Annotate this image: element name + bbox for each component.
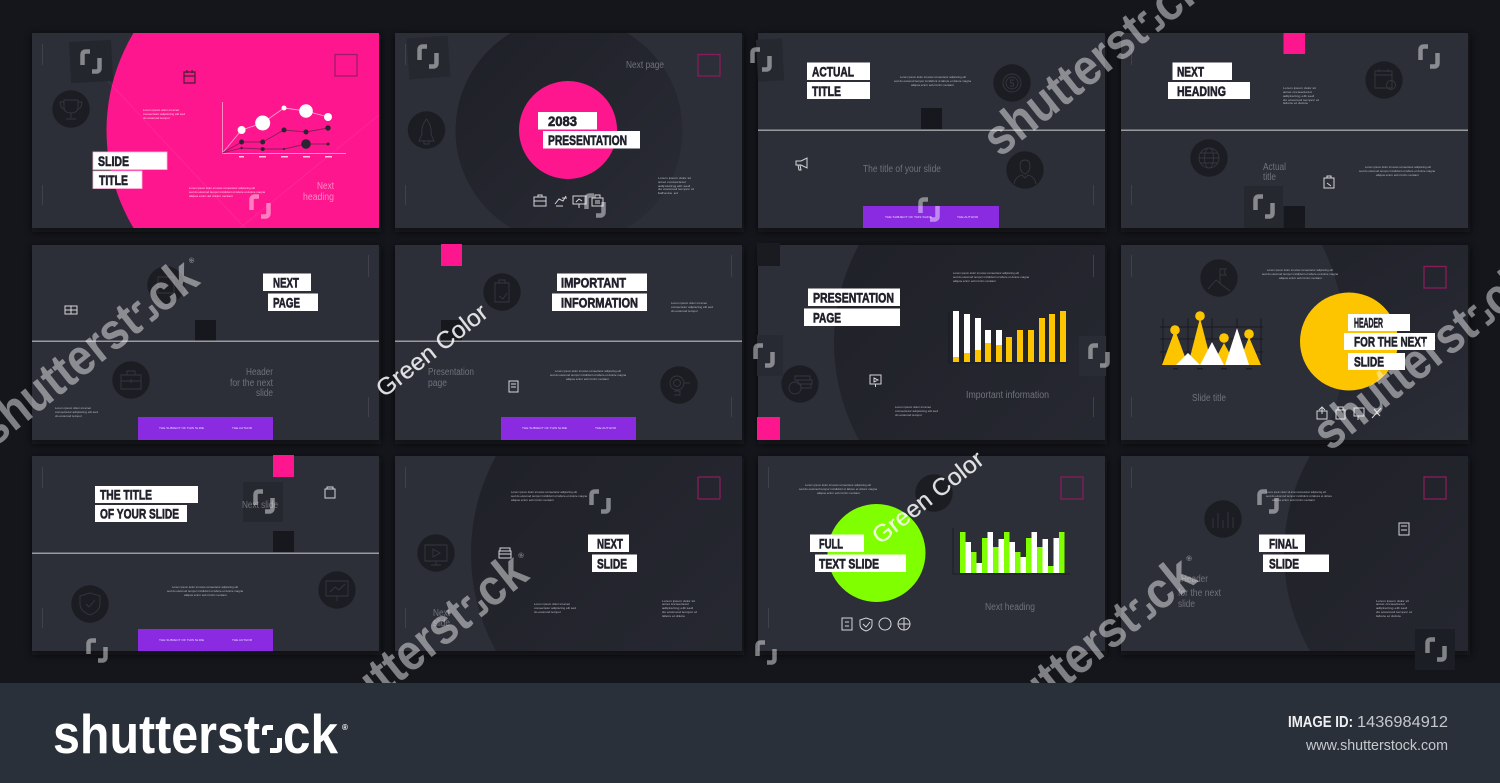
text block	[1266, 490, 1332, 502]
text block	[671, 301, 713, 313]
title label: NEXT HEADING	[1168, 62, 1250, 99]
text block: do eiusmod tempor ut	[1283, 98, 1319, 102]
heading: Next slide: slide	[433, 618, 450, 629]
purple bar	[138, 417, 273, 440]
watermark: shutterstock left: ck	[133, 247, 209, 323]
icon: person circle	[1006, 151, 1044, 189]
panel: slide 2	[395, 33, 742, 228]
text block: labore et dolore	[1376, 614, 1401, 618]
text block: aliqua enim ad minim veniam	[953, 279, 997, 283]
text block: sed do eiusmod tempor incididunt ut labore et dolore magna	[894, 79, 971, 83]
text block: aliqua enim ad minim veniam	[911, 83, 955, 87]
icon: flag mountain circle	[1200, 259, 1238, 297]
text block: sed do eiusmod tempor incididunt ut labore et dolore	[1266, 494, 1332, 498]
text block: do eiusmod tempor ut	[662, 610, 697, 614]
text block: consectetur adipiscing elit sed	[143, 112, 185, 116]
text block: adipiscing elit sed	[662, 606, 693, 610]
title label: NEXT HEADING: HEADING	[1177, 83, 1226, 99]
panel: slide 1	[32, 33, 379, 228]
title label: FULL TEXT SLIDE: FULL	[819, 536, 843, 552]
heading: Next slide: Next	[433, 608, 450, 619]
text block: sed do eiusmod tempor incididunt ut labore et dolore magna	[167, 589, 243, 593]
watermark: shutterstock bottom centre-left	[295, 536, 545, 752]
text block	[1262, 268, 1338, 280]
pink frame	[1424, 477, 1446, 499]
title label: FINAL SLIDE: FINAL	[1269, 536, 1298, 552]
green circle	[828, 504, 926, 602]
pink frame	[1424, 266, 1446, 288]
text block	[662, 599, 697, 618]
text block: Lorem ipsum dolor sit amet consectetur adipiscing elit	[900, 75, 966, 79]
line chart	[222, 102, 346, 158]
icon: calendar	[184, 70, 195, 83]
pink frame	[1061, 477, 1083, 499]
icon: logo badge	[242, 482, 283, 522]
title label: PRESENTATION PAGE: PRESENTATION	[813, 290, 894, 306]
text block: do eiusmod tempor	[143, 116, 170, 120]
icon: bar chart circle	[1204, 500, 1242, 538]
icon: logo badge: Next slide	[242, 500, 278, 511]
dark circle background	[1284, 456, 1468, 651]
title label: IMPORTANT INFORMATION: IMPORTANT	[561, 274, 626, 290]
panel: slide 7	[753, 243, 1110, 440]
title label: NEXT SLIDE	[588, 534, 637, 572]
text block	[895, 405, 938, 417]
heading: Presentation page	[428, 367, 474, 389]
website url: www.shutterstock.com	[1305, 738, 1448, 754]
text block: do eiusmod tempor	[534, 610, 561, 614]
purple bar: THE AUTHOR	[595, 426, 617, 430]
pink frame	[698, 54, 720, 76]
icon: clipboard	[1324, 176, 1334, 188]
title label: FULL TEXT SLIDE	[810, 534, 906, 572]
text block: consectetur adipiscing elit sed	[671, 305, 713, 309]
title label: SLIDE TITLE: TITLE	[99, 172, 128, 188]
heading: Header for the next slide: for the next	[230, 378, 273, 389]
heading: The title of your slide: The title of your slide	[863, 164, 941, 175]
icon: shield circle	[71, 585, 109, 623]
text block: aliqua enim ad minim veniam	[1376, 173, 1420, 177]
title label: SLIDE TITLE: SLIDE	[98, 153, 129, 169]
icon: logo badge	[69, 40, 113, 83]
text block	[534, 602, 576, 614]
purple bar: THE SUBJECT OF THIS SLIDE	[522, 426, 567, 430]
icon: coins	[499, 548, 511, 558]
heading: Header for the next slide: Header	[246, 367, 274, 378]
text block: Lorem ipsum dolor sit amet	[895, 405, 931, 409]
panel: slide 10	[395, 456, 742, 651]
text block: sed do eiusmod tempor incididunt ut labore et dolore magna	[1262, 272, 1338, 276]
title label: 2083 PRESENTATION	[538, 112, 640, 148]
watermark: shutterstock bottom centre-right: ck	[1130, 545, 1206, 621]
icon: monitor circle	[417, 534, 455, 572]
bar chart	[953, 528, 1070, 574]
dark circle background	[834, 245, 1105, 440]
text block: Lorem ipsum dolor sit	[1283, 86, 1316, 90]
heading: Next page: Next page	[626, 60, 664, 71]
footer logo: shutterstock: shutterst	[53, 703, 260, 765]
text block: amet consectetur	[1283, 90, 1312, 94]
text block: sed do eiusmod tempor incididunt ut labore et dolore magna	[953, 275, 1029, 279]
heading: Slide title: Slide title	[1192, 393, 1226, 404]
heading: Presentation page: Presentation	[428, 367, 474, 378]
pink square	[1284, 33, 1305, 54]
text block: Lorem ipsum dolor sit	[658, 176, 691, 180]
bar chart	[949, 311, 1068, 363]
icon: cards	[65, 306, 77, 314]
title label: NEXT PAGE: NEXT	[273, 274, 299, 290]
watermark: shutterstock bottom centre-right: shutterst	[963, 590, 1149, 755]
icon: clipboard circle	[483, 273, 521, 311]
text block	[189, 186, 265, 198]
icon: calendar circle	[1365, 61, 1403, 99]
purple bar	[138, 629, 273, 651]
purple bar: THE SUBJECT OF THIS SLIDE	[159, 638, 204, 642]
text block: sed do eiusmod tempor incididunt ut labore et dolore magna	[799, 487, 877, 491]
text block	[143, 108, 185, 120]
text block: do eiusmod tempor	[55, 414, 82, 418]
icon: logo bracket	[586, 196, 604, 216]
text block: do eiusmod tempor	[895, 413, 922, 417]
text block: Lorem ipsum dolor sit amet	[55, 406, 91, 410]
title label: HEADER FOR THE NEXT SLIDE: HEADER	[1354, 314, 1383, 330]
pink circle	[519, 81, 617, 179]
text block: aliqua enim ad minim veniam	[1279, 276, 1323, 280]
heading: Header for the next slide	[230, 367, 274, 399]
text block	[167, 585, 243, 597]
dark square	[195, 320, 216, 341]
icon: logo bracket	[1260, 492, 1276, 512]
text block: Lorem ipsum dolor sit	[662, 599, 695, 603]
icon: megaphone	[796, 158, 807, 170]
icon: trophy circle	[52, 90, 90, 128]
text block	[799, 483, 877, 495]
watermark: shutterstock bottom centre-left: ck	[462, 542, 538, 618]
text block	[1283, 86, 1319, 105]
purple bar	[863, 206, 999, 228]
heading: Next heading: Next	[317, 181, 334, 192]
title label: THE TITLE OF YOUR SLIDE: THE TITLE	[100, 486, 152, 502]
text block: sed do eiusmod tempor incididunt ut labore et dolore magna	[1359, 169, 1435, 173]
heading: Actual title: title	[1263, 172, 1276, 183]
title label: 2083 PRESENTATION: PRESENTATION	[548, 132, 627, 148]
icon row	[534, 195, 603, 208]
text block: sed do eiusmod tempor incididunt ut labore et dolore magna	[550, 373, 626, 377]
text block	[894, 75, 971, 87]
icon: presentation screen	[870, 375, 881, 387]
panel: slide 9	[32, 455, 379, 660]
text block: Lorem ipsum dolor sit amet consectetur adipiscing elit	[1267, 268, 1333, 272]
pink frame	[335, 54, 357, 76]
title label: PRESENTATION PAGE	[804, 288, 900, 326]
watermark: shutterstock bottom centre-left: shutterst	[295, 587, 481, 752]
icon: logo badge	[752, 38, 784, 82]
dark circle background	[471, 456, 742, 651]
purple bar: THE SUBJECT OF THIS SLIDE	[885, 215, 932, 219]
text block: adipiscing elit sed	[1376, 606, 1407, 610]
text block: aliqua enim ad minim veniam	[566, 377, 610, 381]
title label: NEXT PAGE: PAGE	[273, 294, 300, 310]
text block: consectetur adipiscing elit sed	[534, 606, 576, 610]
title label: FINAL SLIDE	[1259, 534, 1329, 572]
text block: Lorem ipsum dolor sit amet	[671, 301, 707, 305]
text block: Lorem ipsum dolor sit amet consectetur adipiscing elit	[805, 483, 871, 487]
text block: sed do eiusmod tempor incididunt ut labore et dolore magna	[511, 494, 587, 498]
icon: coin circle	[993, 64, 1031, 102]
heading: Header for the next slide: for the next	[1178, 588, 1221, 599]
text block: Lorem ipsum dolor sit amet consectetur adipiscing elit	[555, 369, 621, 373]
image id: 1436984912	[1357, 714, 1448, 731]
panel: slide 6	[395, 244, 742, 440]
icon: chart board circle	[318, 571, 356, 609]
text block: labore et	[658, 191, 678, 195]
icon: logo bracket	[252, 196, 268, 216]
icon: logo bracket	[758, 642, 774, 662]
panel: slide 8	[1121, 245, 1468, 440]
image id: IMAGE ID:	[1288, 714, 1353, 731]
panel: slide 3	[752, 33, 1105, 228]
icon: logo badge	[1244, 186, 1283, 228]
icon: rocket circle	[408, 111, 445, 149]
text block: aliqua enim ad minim veniam	[189, 194, 234, 198]
title label: ACTUAL TITLE: ACTUAL	[812, 64, 854, 80]
text block: Lorem ipsum dolor sit amet consectetur adipiscing elit	[1266, 490, 1326, 494]
text block: sed do eiusmod tempor incididunt ut labore et dolore magna	[189, 190, 265, 194]
pink square	[441, 244, 462, 266]
text block: do eiusmod tempor ut	[658, 187, 694, 191]
text block: Lorem ipsum dolor sit amet	[534, 602, 570, 606]
title label: ACTUAL TITLE	[807, 62, 870, 99]
text block: Lorem ipsum dolor sit amet consectetur adipiscing elit	[189, 186, 255, 190]
heading: Important information: Important information	[966, 390, 1049, 401]
title label: THE TITLE OF YOUR SLIDE: OF YOUR SLIDE	[100, 506, 179, 522]
heading: Header for the next slide: slide	[256, 388, 273, 399]
text block: consectetur adipiscing elit sed	[895, 409, 938, 413]
pink square	[273, 455, 294, 477]
image id	[1288, 714, 1448, 731]
title label: 2083 PRESENTATION: 2083	[548, 113, 577, 129]
icon row	[842, 618, 910, 631]
dark square	[1284, 206, 1305, 228]
title label: HEADER FOR THE NEXT SLIDE: SLIDE	[1354, 354, 1384, 370]
title label: PRESENTATION PAGE: PAGE	[813, 310, 841, 326]
watermark: shutterstock bottom centre-right: ®	[1184, 553, 1194, 564]
text block	[1376, 599, 1412, 618]
heading: Next heading: heading	[303, 192, 334, 203]
text block	[511, 490, 587, 502]
text block: adipiscing elit sed	[1283, 94, 1314, 98]
text block: aliqua enim ad minim veniam	[817, 491, 861, 495]
text block: consectetur adipiscing elit sed	[55, 410, 98, 414]
purple bar: THE AUTHOR	[232, 638, 253, 642]
dark square	[921, 108, 942, 129]
watermark: Green Color slide 11: Green Color	[867, 446, 989, 550]
icon: target bulb circle	[660, 366, 698, 404]
heading: Actual title	[1263, 162, 1286, 183]
mountain chart	[1160, 311, 1263, 370]
watermark: Green Color slide 6: Green Color	[371, 299, 493, 403]
icon: device	[1399, 523, 1409, 535]
icon: logo badge left	[756, 335, 783, 376]
heading: Header for the next slide	[1178, 574, 1221, 610]
text block: Lorem ipsum dolor sit amet consectetur adipiscing elit	[953, 271, 1019, 275]
heading: Next heading	[303, 181, 334, 203]
text block: Lorem ipsum dolor sit amet consectetur adipiscing elit	[511, 490, 577, 494]
icon: logo badge	[407, 36, 450, 79]
text block: amet consectetur	[1376, 602, 1405, 606]
title label: IMPORTANT INFORMATION: INFORMATION	[561, 294, 638, 310]
heading: Actual title: Actual	[1263, 162, 1286, 173]
icon: device	[325, 487, 335, 498]
title label: HEADER FOR THE NEXT SLIDE	[1344, 314, 1435, 370]
dark square	[757, 243, 780, 266]
icon: device	[509, 381, 518, 392]
heading: Header for the next slide: slide	[1178, 599, 1195, 610]
icon: logo bracket	[592, 492, 608, 512]
dark square	[441, 320, 462, 341]
panel: slide 11	[758, 456, 1105, 662]
text block: labore et dolore	[1283, 101, 1308, 105]
purple bar	[501, 417, 636, 440]
icon: logo badge	[1415, 629, 1455, 670]
text block	[658, 176, 694, 195]
watermark: shutterstock bottom centre-left: ®	[516, 550, 526, 561]
footer logo: shutterstock: ck	[283, 703, 338, 765]
icon: logo bracket	[920, 200, 938, 220]
text block: aliqua enim ad minim veniam	[1272, 498, 1316, 502]
watermark: shutterstock left: ®	[187, 255, 197, 266]
icon: coins circle	[781, 365, 819, 403]
text block: do eiusmod tempor ut	[1376, 610, 1412, 614]
text block: aliqua enim ad minim veniam	[511, 498, 555, 502]
icon: globe circle	[1190, 139, 1228, 177]
title label: NEXT SLIDE: NEXT	[597, 536, 623, 552]
dark circle background	[456, 33, 672, 228]
icon: circle top	[915, 474, 953, 512]
title label: ACTUAL TITLE: TITLE	[812, 83, 841, 99]
text block: amet consectetur	[662, 602, 689, 606]
text block	[953, 271, 1029, 283]
title label: HEADER FOR THE NEXT SLIDE: FOR THE NEXT	[1354, 334, 1427, 350]
title label: NEXT PAGE	[263, 274, 318, 311]
heading: Presentation page: page	[428, 378, 447, 389]
title label: IMPORTANT INFORMATION	[552, 274, 647, 311]
watermark: shutterstock left	[0, 241, 216, 457]
text block: Lorem ipsum dolor sit amet consectetur adipiscing elit	[1365, 165, 1431, 169]
yellow circle	[1300, 292, 1398, 390]
panel: slide 5	[32, 245, 379, 440]
text block: Lorem ipsum dolor sit amet	[143, 108, 179, 112]
text block: do eiusmod tempor	[671, 309, 698, 313]
purple bar: THE AUTHOR	[957, 215, 979, 219]
icon: logo bracket	[88, 640, 106, 660]
panel: slide 4	[1121, 33, 1468, 228]
title label: THE TITLE OF YOUR SLIDE	[95, 486, 198, 522]
heading: Next heading: Next heading	[985, 602, 1035, 613]
title label: SLIDE TITLE	[93, 152, 167, 188]
text block: Lorem ipsum dolor sit	[1376, 599, 1409, 603]
text block: Lorem ipsum dolor sit amet consectetur adipiscing elit	[172, 585, 238, 589]
purple bar: THE AUTHOR	[232, 426, 253, 430]
icon: logo badge right	[1079, 336, 1108, 376]
footer bar	[0, 683, 1500, 783]
watermark: shutterstock bottom centre-right	[963, 539, 1213, 755]
title label: NEXT SLIDE: SLIDE	[597, 556, 627, 572]
footer logo: shutterstock: ®	[342, 723, 348, 732]
heading: Next slide	[433, 608, 450, 629]
purple bar: THE SUBJECT OF THIS SLIDE	[159, 426, 204, 430]
icon: logo bracket	[1420, 46, 1438, 66]
text block	[550, 369, 626, 381]
pink frame	[698, 477, 720, 499]
title label: FULL TEXT SLIDE: TEXT SLIDE	[819, 556, 879, 572]
icon row	[1317, 407, 1381, 420]
text block: amet consectetur	[658, 180, 686, 184]
icon: puzzle circle	[147, 266, 185, 304]
dark square	[273, 531, 294, 552]
text block: aliqua enim ad minim veniam	[184, 593, 228, 597]
pink square	[757, 417, 780, 440]
text block: labore et dolore	[662, 614, 685, 618]
panel: slide 12	[1121, 456, 1468, 670]
text block: adipiscing elit sed	[658, 184, 690, 188]
text block	[1359, 165, 1435, 177]
title label: NEXT HEADING: NEXT	[1177, 64, 1204, 80]
text block	[55, 406, 98, 418]
title label: FINAL SLIDE: SLIDE	[1269, 556, 1299, 572]
icon: briefcase circle	[112, 361, 150, 399]
pink circle	[106, 33, 379, 228]
heading: Header for the next slide: Header	[1181, 574, 1209, 585]
